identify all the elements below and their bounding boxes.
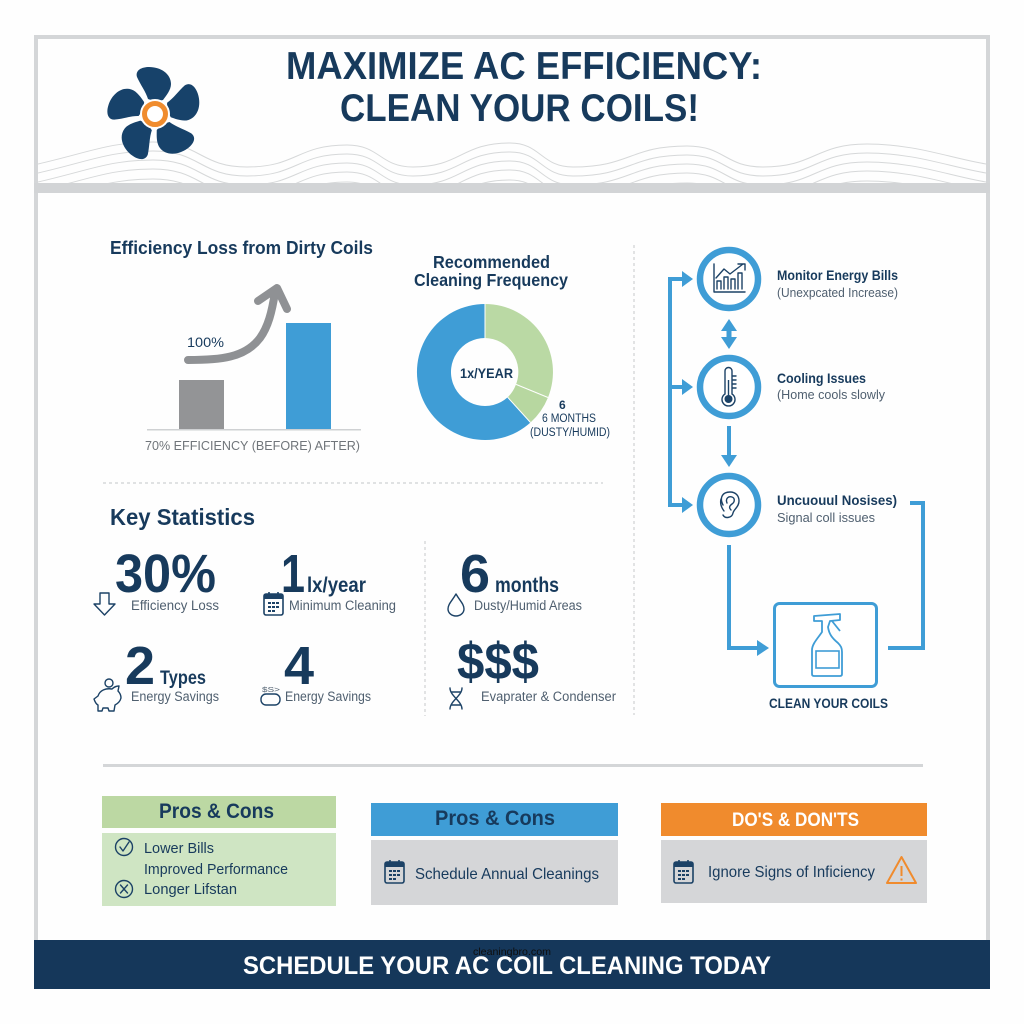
pros list: Longer Lifstan [144,881,237,898]
donut side label: 6 [559,398,566,412]
stat: $$$ evaporator and condenser [450,633,616,709]
green header [102,796,336,828]
stat: 4 energy savings: $S> [262,685,281,694]
connector: left bracket with arrows [670,271,693,513]
stat: 1x/year minimum cleaning: lx/year [307,574,366,597]
icon: check [116,838,132,856]
orange heading text: DO'S & DON'TS [732,810,859,831]
stat: 2 types energy savings: Types [160,668,206,689]
icon: calendar [674,860,693,883]
step: monitor energy bills [700,250,898,308]
heading: cleaning frequency: Cleaning Frequency [414,270,568,290]
step: cooling issues: (Home cools slowly [777,388,886,402]
bar: before [179,380,224,429]
panel: do's and don'ts [661,803,927,903]
stat: 2 types energy savings [94,636,219,711]
axis caption: 70% EFFICIENCY (BEFORE) AFTER) [145,438,360,453]
stat: 1x/year minimum cleaning: 1 [281,544,305,604]
stat: 6 months dusty areas [448,544,582,616]
donut side label: 6 MONTHS [542,413,596,425]
connector: noises to clean box [729,545,769,656]
header wave pattern [38,142,986,183]
stat: $$$ evaporator and condenser: Evaprater & Condenser [481,689,616,704]
icon: calendar [385,860,404,883]
panel: cleaning frequency donut [414,252,610,440]
blue body [371,840,618,905]
stat: 1x/year minimum cleaning [264,544,396,615]
footer banner [34,940,990,989]
step: clean your coils [769,604,888,711]
stat: 4 energy savings: Energy Savings [285,689,371,704]
step: unusual noises [700,476,897,534]
icon: cross [116,880,132,898]
green heading text: Pros & Cons [159,800,274,823]
label: 100%: 100% [187,334,224,350]
step: monitor energy bills: Monitor Energy Bills [777,267,898,283]
stat: 6 months dusty areas: months [495,574,559,597]
blue body text: Schedule Annual Cleanings [415,866,599,883]
stat: 2 types energy savings: Energy Savings [131,689,219,704]
orange body text: Ignore Signs of Inficiency [708,864,875,881]
icon: fan logo [105,67,205,163]
heading: key statistics: Key Statistics [110,504,255,530]
step: clean your coils: CLEAN YOUR COILS [769,695,888,711]
green body [102,833,336,906]
connector: right bracket [888,503,923,648]
panel: efficiency loss chart [110,238,373,453]
panel: key statistics [94,504,616,711]
bar: after [286,323,331,429]
panel: warning signs flowchart [670,250,923,711]
panel: blue pros and cons [371,803,618,905]
arrow: down to noises [721,426,737,467]
donut chart [417,304,553,440]
heading: cleaning frequency: Recommended [433,252,550,272]
stat: 30% efficiency loss: Efficiency Loss [131,598,219,613]
step: cooling issues: Cooling Issues [777,370,866,386]
arrow: double headed [721,319,737,349]
pros list: Lower Bills [144,840,214,857]
blue header [371,803,618,836]
step: cooling issues [700,358,886,416]
title: MAXIMIZE AC EFFICIENCY: [286,45,762,88]
stat: 4 energy savings [261,636,371,705]
panel: green pros and cons [102,796,336,906]
step: unusual noises: Uncuouul Nosises) [777,492,897,508]
pros list [144,840,288,898]
header divider band [34,183,990,193]
stat: 4 energy savings: 4 [284,636,314,696]
icon: warning [887,857,916,883]
footer call to action: SCHEDULE YOUR AC COIL CLEANING TODAY [243,952,771,980]
donut side label [530,398,610,439]
axis line [147,429,361,430]
donut centre label: 1x/YEAR [460,365,513,381]
blue heading text: Pros & Cons [435,807,555,830]
arrow: rising trend [188,288,287,360]
source watermark: cleaningbro.com [473,946,551,958]
step: unusual noises: Signal coll issues [777,511,875,525]
stat: 1x/year minimum cleaning: Minimum Cleaning [289,598,396,613]
stat: 6 months dusty areas: Dusty/Humid Areas [474,598,582,613]
pros list: Improved Performance [144,861,288,878]
title: CLEAN YOUR COILS! [340,87,699,130]
stat: 30% efficiency loss: 30% [115,544,216,604]
donut side label: (DUSTY/HUMID) [530,427,610,439]
orange header [661,803,927,836]
stat: 30% efficiency loss [94,544,219,615]
heading: cleaning frequency [414,252,568,290]
orange body [661,840,927,903]
stat: $$$ evaporator and condenser: $$$ [457,633,539,691]
stat: 2 types energy savings: 2 [125,636,155,696]
title [286,45,762,130]
stat: 6 months dusty areas: 6 [460,544,490,604]
heading: efficiency loss: Efficiency Loss from Dirty Coils [110,238,373,258]
step: monitor energy bills: (Unexpcated Increase) [777,286,898,300]
